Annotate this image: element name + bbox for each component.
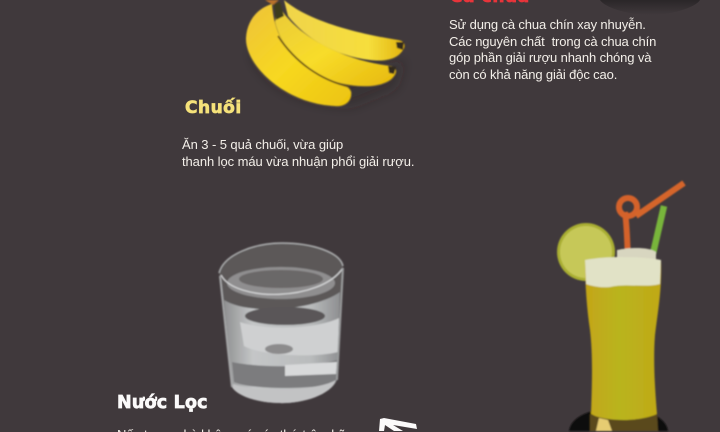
text: banana <box>182 137 414 168</box>
text: banana: Ăn 3 - 5 quả chuối, vừa giúp <box>182 137 343 152</box>
arrow <box>379 418 417 431</box>
text: tomato: còn có khả năng giải độc cao. <box>449 66 617 82</box>
icon: bananas <box>246 0 405 106</box>
heading: Nước Lọc: Nước Lọc <box>117 393 208 413</box>
text: tomato: góp phần giải rượu nhanh chóng và <box>449 50 651 65</box>
icon: juice glass <box>557 183 684 431</box>
tomato shadow <box>600 0 700 15</box>
text: tomato <box>449 17 656 82</box>
icon: glass of water <box>219 243 343 403</box>
text: tomato: Sử dụng cà chua chín xay nhuyễn. <box>449 17 646 32</box>
text: tomato: Các nguyên chất trong cà chua chín <box>449 34 656 48</box>
heading: Chuối: Chuối <box>185 98 242 118</box>
text: banana: thanh lọc máu vừa nhuận phổi giải rượu. <box>182 154 414 168</box>
